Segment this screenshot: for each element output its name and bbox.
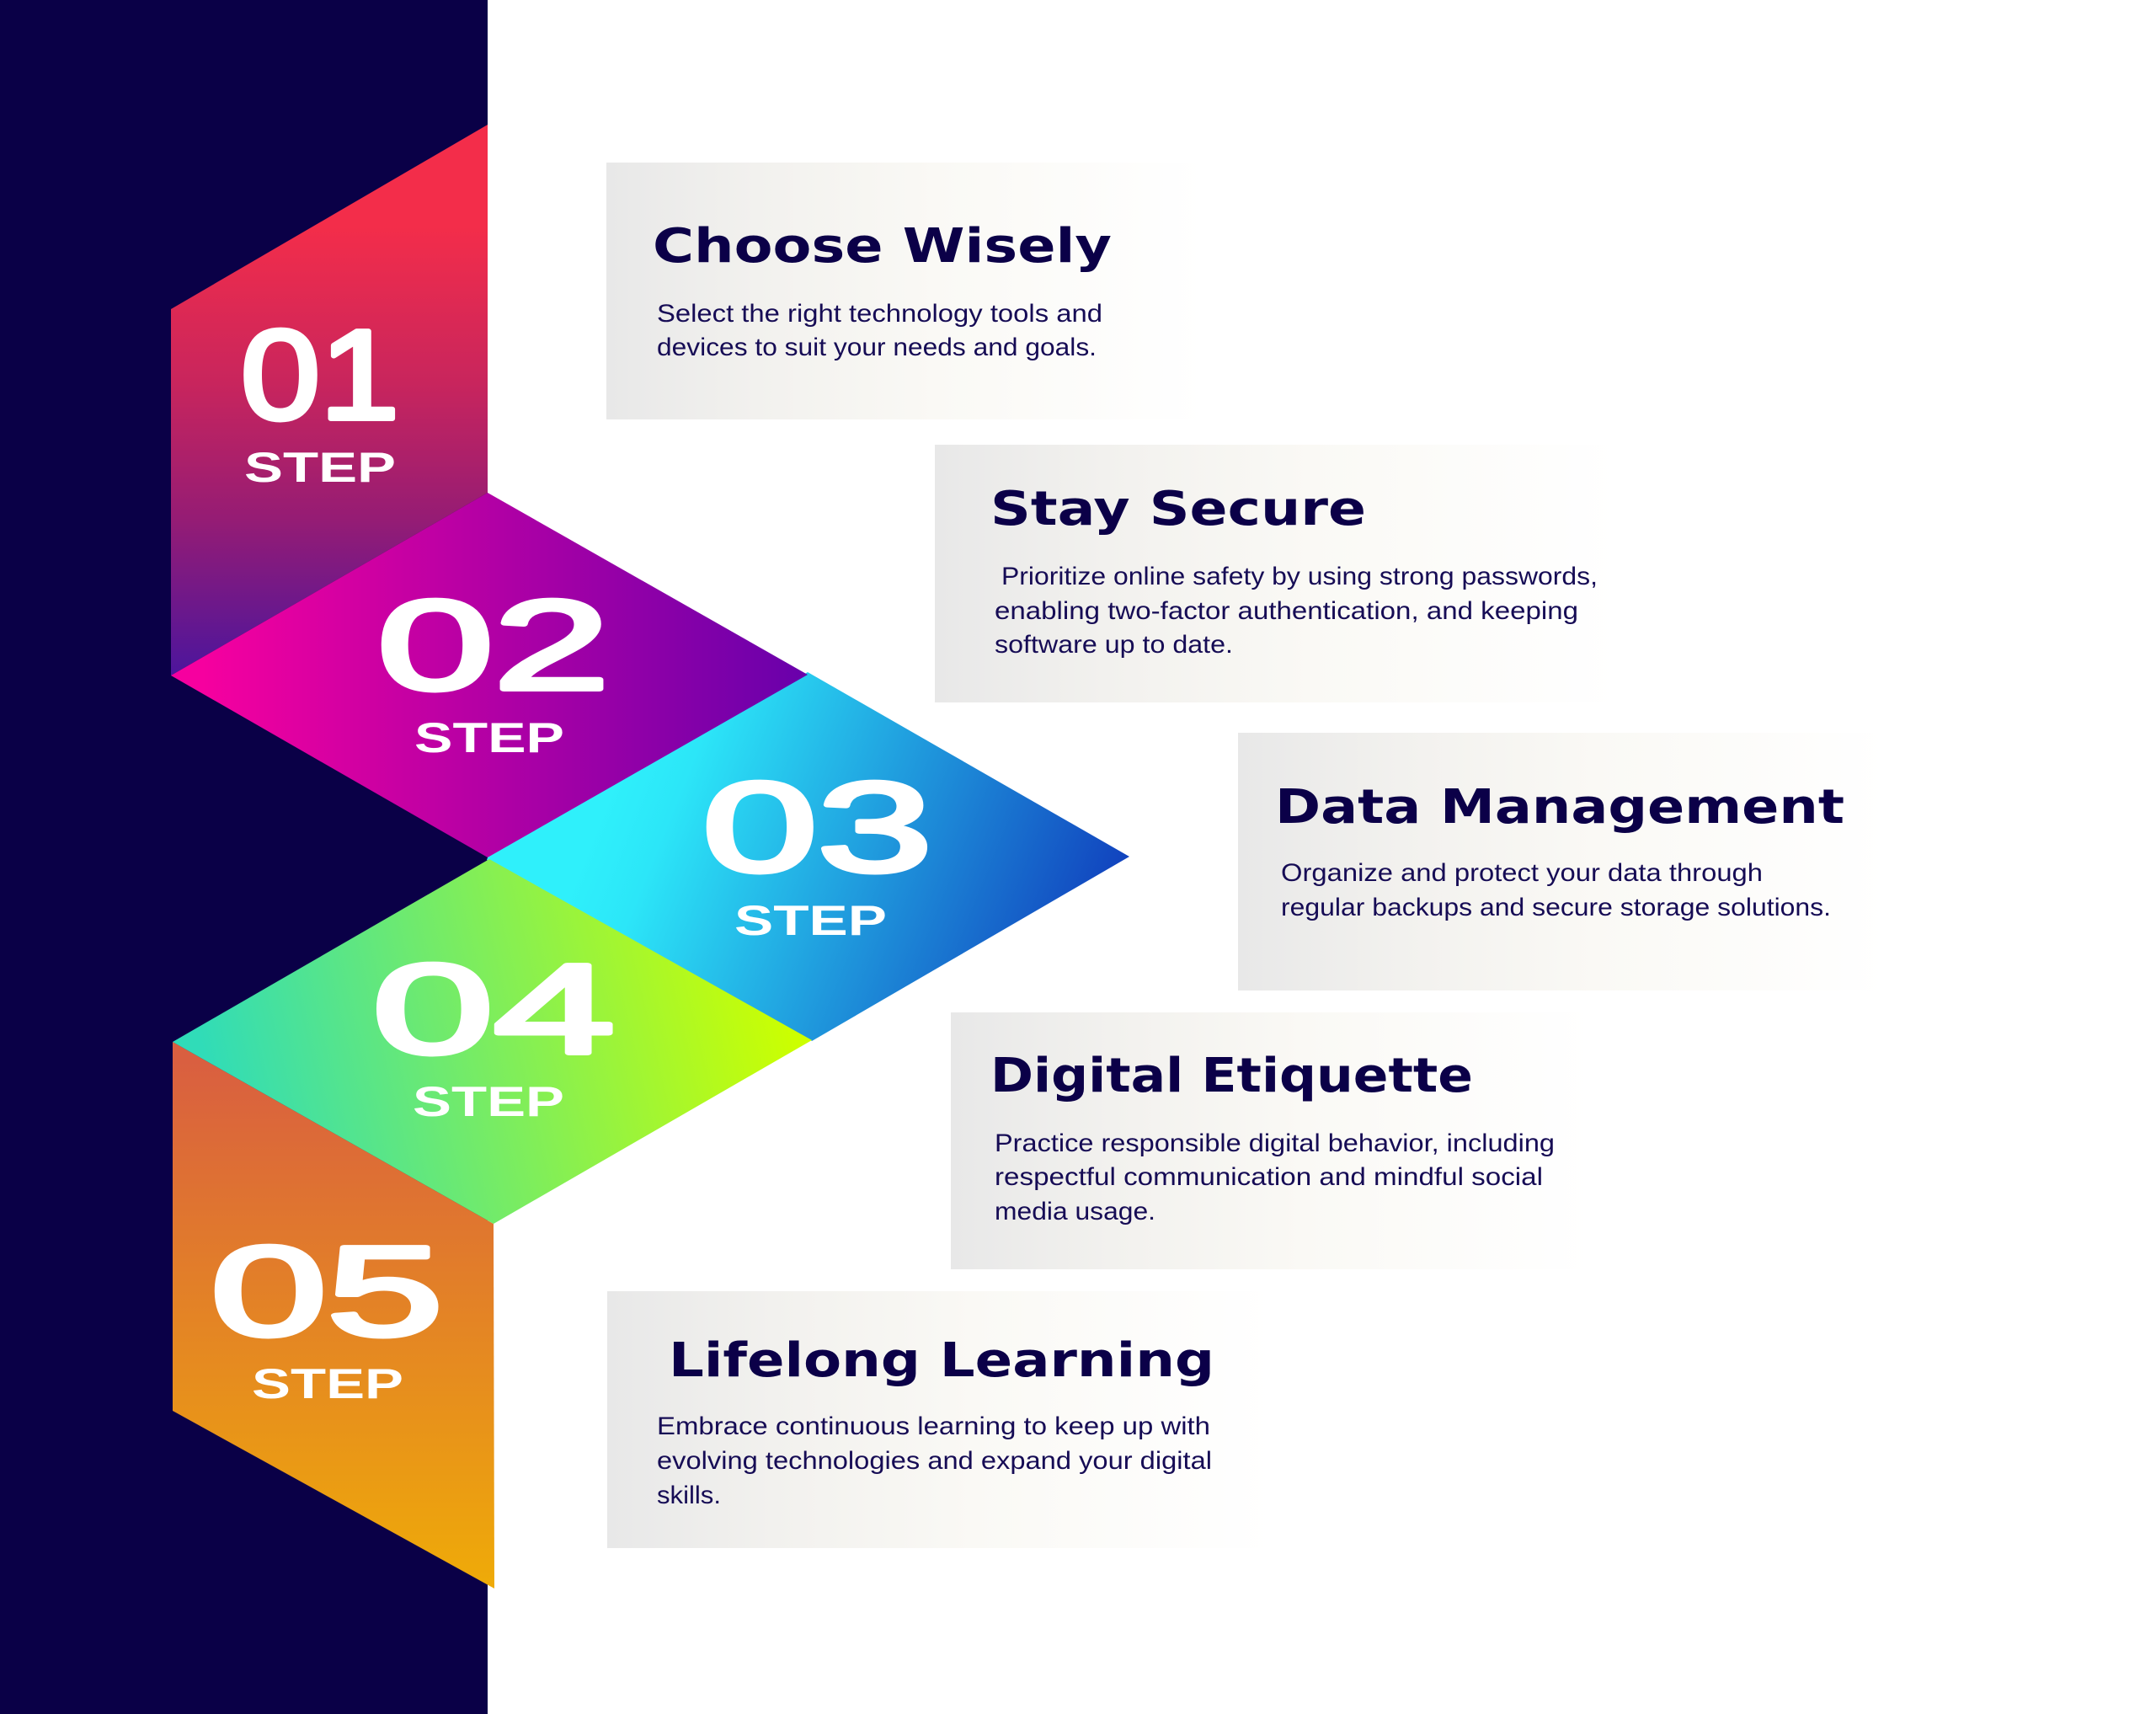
text: Digital Etiquette body: media usage. xyxy=(995,1198,1155,1225)
step 02 block xyxy=(171,493,808,857)
heading: Digital Etiquette: Digital Etiquette xyxy=(990,1049,1473,1103)
shape: step 05 hexagon xyxy=(173,1042,494,1589)
text: Choose Wisely body: Select the right technology tools and xyxy=(657,300,1102,328)
step 05 block xyxy=(173,1042,494,1589)
number 03: 03 xyxy=(702,756,932,898)
step 03 block xyxy=(487,672,1129,1041)
heading: Choose Wisely: Choose Wisely xyxy=(653,219,1112,274)
background band xyxy=(0,0,488,1714)
label: step 04: STEP xyxy=(413,1078,564,1125)
text: Stay Secure body: enabling two-factor authentication, and keeping xyxy=(995,597,1578,625)
step 01 block xyxy=(171,125,488,675)
shape: step 03 arrow xyxy=(487,672,1129,1041)
text: Choose Wisely body xyxy=(657,300,1102,361)
text: Digital Etiquette body: respectful communication and mindful social xyxy=(995,1163,1543,1191)
text: Digital Etiquette body: Practice responsible digital behavior, including xyxy=(995,1129,1555,1157)
number 04: 04 xyxy=(372,937,615,1080)
label: step 05: STEP xyxy=(252,1360,403,1407)
text: Lifelong Learning body xyxy=(657,1412,1212,1509)
text: Lifelong Learning body: skills. xyxy=(657,1482,721,1509)
shape: step 04 diamond xyxy=(173,859,812,1224)
panel: Digital Etiquette xyxy=(951,1012,1591,1269)
step 04 block xyxy=(173,859,812,1224)
label: step 01: STEP xyxy=(244,444,396,491)
label: step 02: STEP xyxy=(414,714,564,761)
text: Digital Etiquette body xyxy=(995,1129,1555,1225)
heading: Stay Secure: Stay Secure xyxy=(990,482,1366,537)
text: Choose Wisely body: devices to suit your needs and goals. xyxy=(657,334,1097,361)
text: Lifelong Learning body: Embrace continuous learning to keep up with xyxy=(657,1412,1210,1440)
number 05: 05 xyxy=(211,1220,443,1362)
text: Data Management body xyxy=(1281,859,1831,921)
text: Data Management body: Organize and protect your data through xyxy=(1281,859,1763,887)
text: Lifelong Learning body: evolving technologies and expand your digital xyxy=(657,1447,1212,1475)
panel: Data Management xyxy=(1238,733,1886,990)
heading: Lifelong Learning: Lifelong Learning xyxy=(669,1333,1214,1388)
panel: Choose Wisely xyxy=(606,163,1204,419)
text: Data Management body: regular backups and secure storage solutions. xyxy=(1281,894,1831,921)
shape: step 01 hexagon xyxy=(171,125,488,675)
text: Stay Secure body: software up to date. xyxy=(995,631,1233,659)
panel: Stay Secure xyxy=(935,445,1617,702)
label: step 03: STEP xyxy=(734,897,887,944)
text: Stay Secure body: Prioritize online safety by using strong passwords, xyxy=(1001,563,1598,590)
number 01: 01 xyxy=(241,303,399,446)
text: Stay Secure body xyxy=(995,563,1598,659)
number 02: 02 xyxy=(377,574,610,716)
shape: step 02 diamond xyxy=(171,493,808,857)
panel: Lifelong Learning xyxy=(607,1291,1273,1548)
heading: Data Management: Data Management xyxy=(1275,780,1844,835)
